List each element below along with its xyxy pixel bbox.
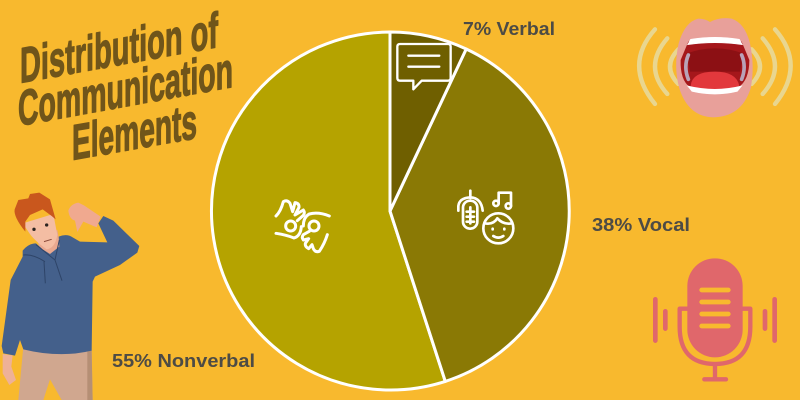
label: 38% Vocal: 38% Vocal: [592, 215, 690, 235]
label: 55% Nonverbal: 55% Nonverbal: [112, 351, 255, 371]
pie chart: [211, 32, 569, 390]
illustration: red microphone: [655, 258, 775, 379]
icon: microphone and singing child: [458, 191, 513, 243]
uvula shadow: [687, 48, 743, 72]
left hand: [3, 354, 16, 385]
hoodie strings: [23, 240, 62, 283]
mouth interior: [681, 38, 749, 91]
icon: signing hands: [276, 201, 329, 252]
raised hand: [68, 203, 101, 232]
upper teeth: [688, 37, 742, 45]
icon: speech bubble: [397, 44, 451, 89]
microphone: [458, 191, 483, 229]
child face: [483, 213, 513, 243]
cradle and stand: [680, 309, 750, 379]
slice: verbal 7%: [390, 32, 466, 211]
hoodie: [2, 216, 139, 356]
slice: nonverbal 55%: [211, 32, 445, 390]
title: Communication: [18, 41, 233, 137]
label: 7% Verbal: 7% Verbal: [463, 19, 555, 39]
trousers: [18, 347, 93, 400]
tongue: [691, 72, 739, 90]
microphone head: [687, 258, 743, 357]
hair: [15, 193, 56, 232]
slice: vocal 38%: [390, 49, 569, 381]
lower teeth: [688, 86, 742, 94]
illustration: man giving thumbs down: [2, 193, 139, 400]
lips: [676, 18, 753, 117]
sound waves: [639, 29, 791, 104]
eyes and mouth: [32, 228, 36, 231]
music note: [493, 193, 511, 209]
title: Elements: [72, 92, 197, 171]
side sound bars: [655, 299, 775, 341]
title: [18, 1, 233, 171]
face: [23, 214, 57, 249]
illustration: open mouth with sound waves: [639, 18, 791, 117]
cheek details: [686, 55, 688, 79]
grille bars: [702, 290, 728, 326]
neck: [37, 230, 61, 255]
